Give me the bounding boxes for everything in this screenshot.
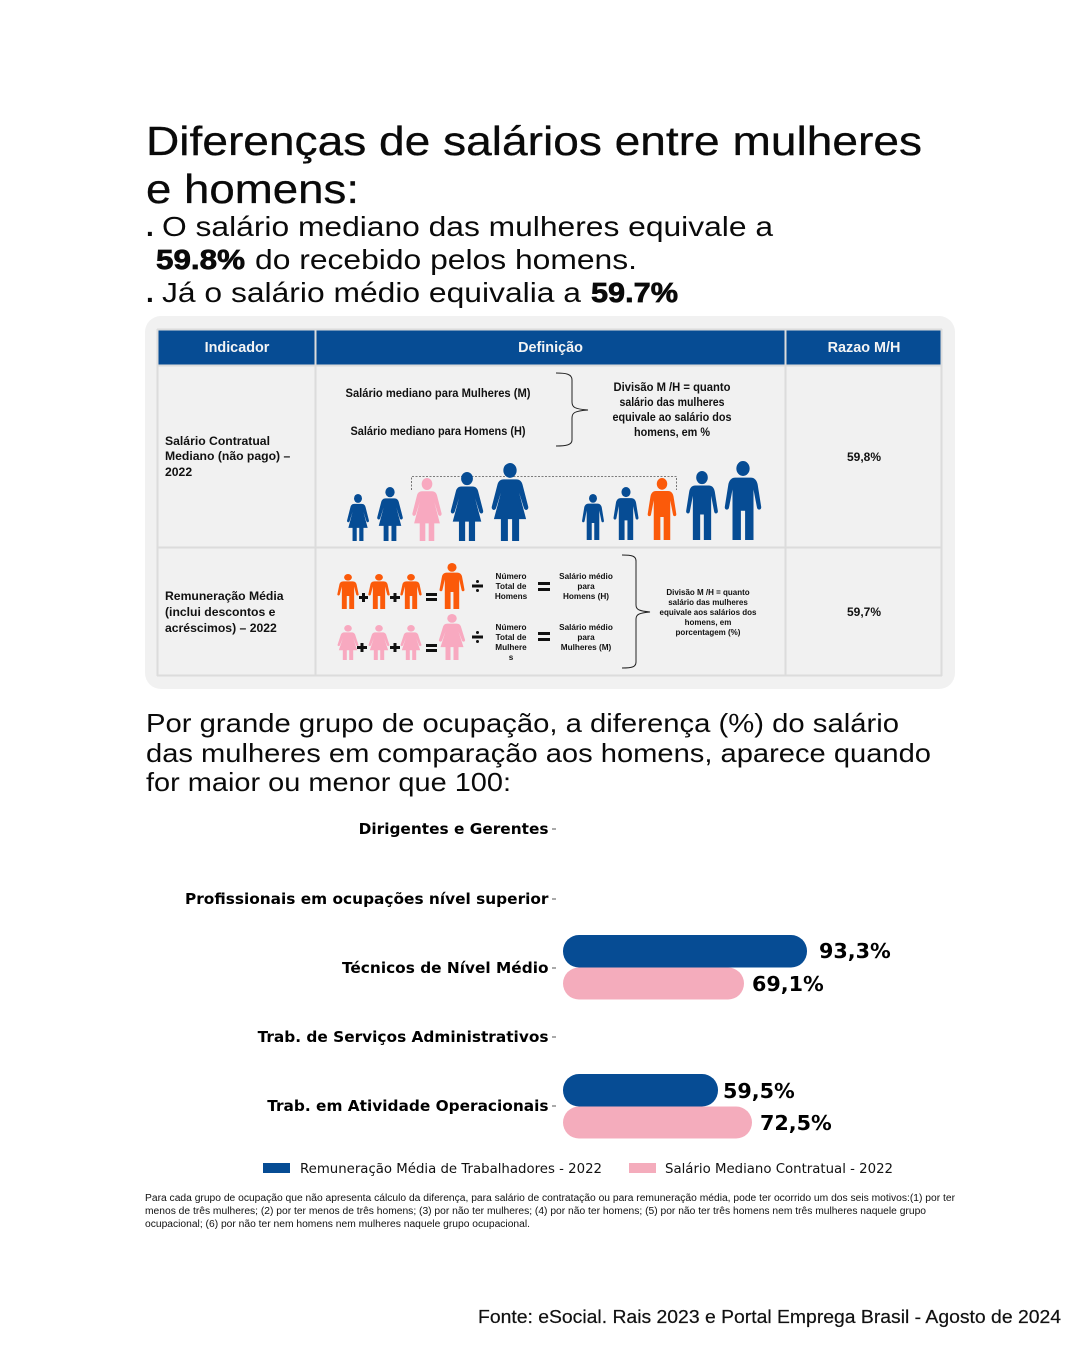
category labels bbox=[185, 820, 549, 1115]
row 1 indicator: Salário Contratual bbox=[165, 434, 270, 448]
row 2 definition: porcentagem (%) bbox=[676, 628, 741, 637]
row 1 indicator: 2022 bbox=[165, 465, 192, 479]
formula labels: s bbox=[509, 653, 514, 662]
panel: indicator table bbox=[145, 316, 955, 689]
row 2 indicator bbox=[165, 589, 284, 635]
row 2 definition: Divisão M /H = quanto bbox=[666, 588, 750, 597]
category labels: Técnicos de Nível Médio bbox=[342, 959, 548, 977]
category labels: Dirigentes e Gerentes bbox=[359, 820, 548, 838]
row 2 definition: equivale aos salários dos bbox=[660, 608, 757, 617]
value labels: 72,5% bbox=[760, 1111, 832, 1135]
brace row 2 bbox=[622, 555, 650, 668]
table header: Indicador bbox=[205, 340, 270, 356]
bars bbox=[563, 935, 807, 1138]
footnote: menos de três mulheres; (2) por ter menos de três homens; (3) por não ter mulheres; (4) por não ter homens; (5) por não ter três homens nem três mulheres naquele grupo bbox=[145, 1206, 926, 1217]
row 1 definition labels: Salário mediano para Mulheres (M) bbox=[346, 388, 531, 400]
formula: women bbox=[338, 614, 550, 660]
table header: Razao M/H bbox=[828, 340, 900, 356]
formula: men bbox=[337, 563, 550, 609]
legend: Salário Mediano Contratual - 2022 bbox=[665, 1161, 893, 1177]
key findings text: 59.8% bbox=[156, 244, 245, 275]
key findings text: do recebido pelos homens. bbox=[255, 244, 637, 275]
category labels: Profissionais em ocupações nível superior bbox=[185, 890, 549, 908]
source: Fonte: eSocial. Rais 2023 e Portal Emprega Brasil - Agosto de 2024 bbox=[478, 1307, 1061, 1327]
value labels: 93,3% bbox=[819, 939, 891, 963]
formula labels: Total de bbox=[496, 633, 527, 642]
formula labels: Número bbox=[496, 572, 526, 581]
row 1 indicator: Mediano (não pago) – bbox=[165, 449, 290, 463]
subtitle text bbox=[146, 708, 931, 797]
title: Diferenças de salários entre mulheres bbox=[146, 118, 922, 164]
row 1 definition labels: Salário mediano para Homens (H) bbox=[350, 426, 526, 438]
footnote: Para cada grupo de ocupação que não apresenta cálculo da diferença, para salário de contratação ou para remuneração média, pode ter ocorrido um dos seis motivos:(1) por ter bbox=[145, 1193, 956, 1204]
formula labels: para bbox=[577, 582, 595, 591]
key findings text: Já o salário médio equivalia a bbox=[162, 277, 581, 308]
key findings text: . bbox=[146, 211, 154, 242]
formula labels: Mulheres (M) bbox=[561, 643, 612, 652]
row 1 definition labels: equivale ao salário dos bbox=[612, 412, 732, 424]
row 2 definition bbox=[660, 588, 757, 637]
legend: Remuneração Média de Trabalhadores - 2022 bbox=[300, 1161, 602, 1177]
row 1 definition labels: homens, em % bbox=[634, 427, 710, 439]
bar chart bbox=[185, 820, 891, 1138]
row 1 definition labels: Divisão M /H = quanto bbox=[614, 382, 730, 394]
footnote bbox=[145, 1193, 956, 1230]
icons: women row bbox=[347, 463, 528, 541]
category labels: Trab. em Atividade Operacionais bbox=[267, 1097, 548, 1115]
brace row 1 bbox=[556, 373, 588, 446]
table header: Definição bbox=[518, 340, 583, 356]
formula labels: Homens (H) bbox=[563, 592, 609, 601]
footnote: ocupacional; (6) por não ter nem homens nem mulheres naquele grupo ocupacional. bbox=[145, 1219, 530, 1230]
formula labels: Salário médio bbox=[559, 623, 613, 632]
row 2 ratio: 59,7% bbox=[847, 605, 881, 619]
dashed connector bbox=[412, 476, 676, 490]
formula labels: Mulhere bbox=[495, 643, 527, 652]
title: e homens: bbox=[146, 166, 359, 212]
row 2 indicator: (inclui descontos e bbox=[165, 605, 276, 619]
formula labels: Total de bbox=[496, 582, 527, 591]
formula labels: Homens bbox=[495, 592, 528, 601]
row 1 definition labels: salário das mulheres bbox=[620, 397, 724, 409]
row 2 definition: homens, em bbox=[685, 618, 731, 627]
row 1 definition labels bbox=[346, 382, 732, 439]
formula labels: Salário médio bbox=[559, 572, 613, 581]
subtitle text: Por grande grupo de ocupação, a diferença (%) do salário bbox=[146, 708, 899, 738]
subtitle text: for maior ou menor que 100: bbox=[146, 767, 511, 797]
value labels bbox=[723, 939, 891, 1135]
icons: men row bbox=[582, 461, 761, 540]
table header bbox=[157, 329, 942, 366]
row 2 indicator: Remuneração Média bbox=[165, 589, 284, 603]
key findings text: 59.7% bbox=[591, 277, 678, 308]
key findings text: O salário mediano das mulheres equivale a bbox=[162, 211, 773, 242]
legend bbox=[263, 1161, 893, 1177]
title bbox=[146, 118, 922, 212]
formula labels: Número bbox=[496, 623, 526, 632]
row 2 indicator: acréscimos) – 2022 bbox=[165, 621, 277, 635]
row 2 definition: salário das mulheres bbox=[668, 598, 748, 607]
row 1 indicator bbox=[165, 434, 290, 479]
key findings text: . bbox=[146, 277, 154, 308]
formula labels bbox=[495, 572, 613, 662]
subtitle text: das mulheres em comparação aos homens, aparece quando bbox=[146, 738, 931, 768]
value labels: 69,1% bbox=[752, 972, 824, 996]
row 1 ratio: 59,8% bbox=[847, 450, 881, 464]
category labels: Trab. de Serviços Administrativos bbox=[258, 1028, 548, 1046]
key findings text bbox=[146, 211, 773, 308]
value labels: 59,5% bbox=[723, 1079, 795, 1103]
formula labels: para bbox=[577, 633, 595, 642]
